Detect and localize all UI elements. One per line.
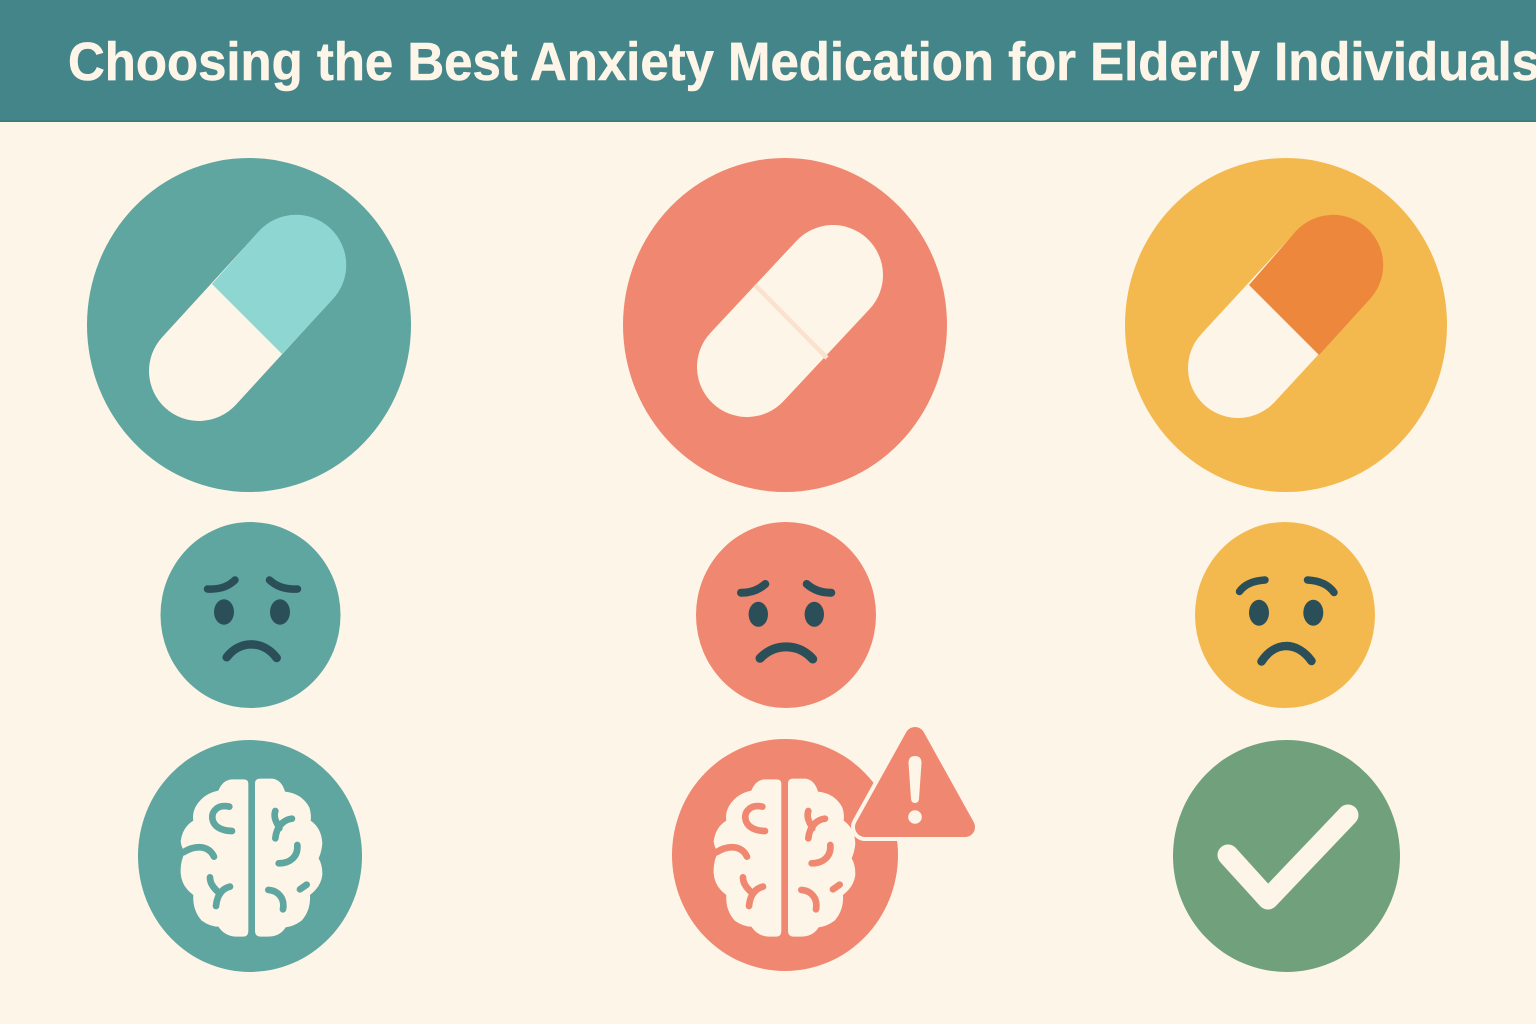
panel: teal column xyxy=(87,158,411,972)
icon: teal and white capsule xyxy=(87,158,411,492)
panel: amber column xyxy=(1125,158,1447,972)
icon: worried face xyxy=(696,522,876,708)
icon: orange and white capsule xyxy=(1125,158,1447,492)
icon: white capsule xyxy=(623,158,947,492)
icon: brain xyxy=(138,740,362,972)
icon: worried face xyxy=(160,522,340,708)
title banner xyxy=(0,0,1536,122)
icon: warning triangle xyxy=(865,737,965,827)
panel: coral column xyxy=(623,158,965,971)
icon: brain xyxy=(672,739,898,971)
icon: worried face xyxy=(1195,522,1375,708)
icon: check mark xyxy=(1173,740,1400,972)
